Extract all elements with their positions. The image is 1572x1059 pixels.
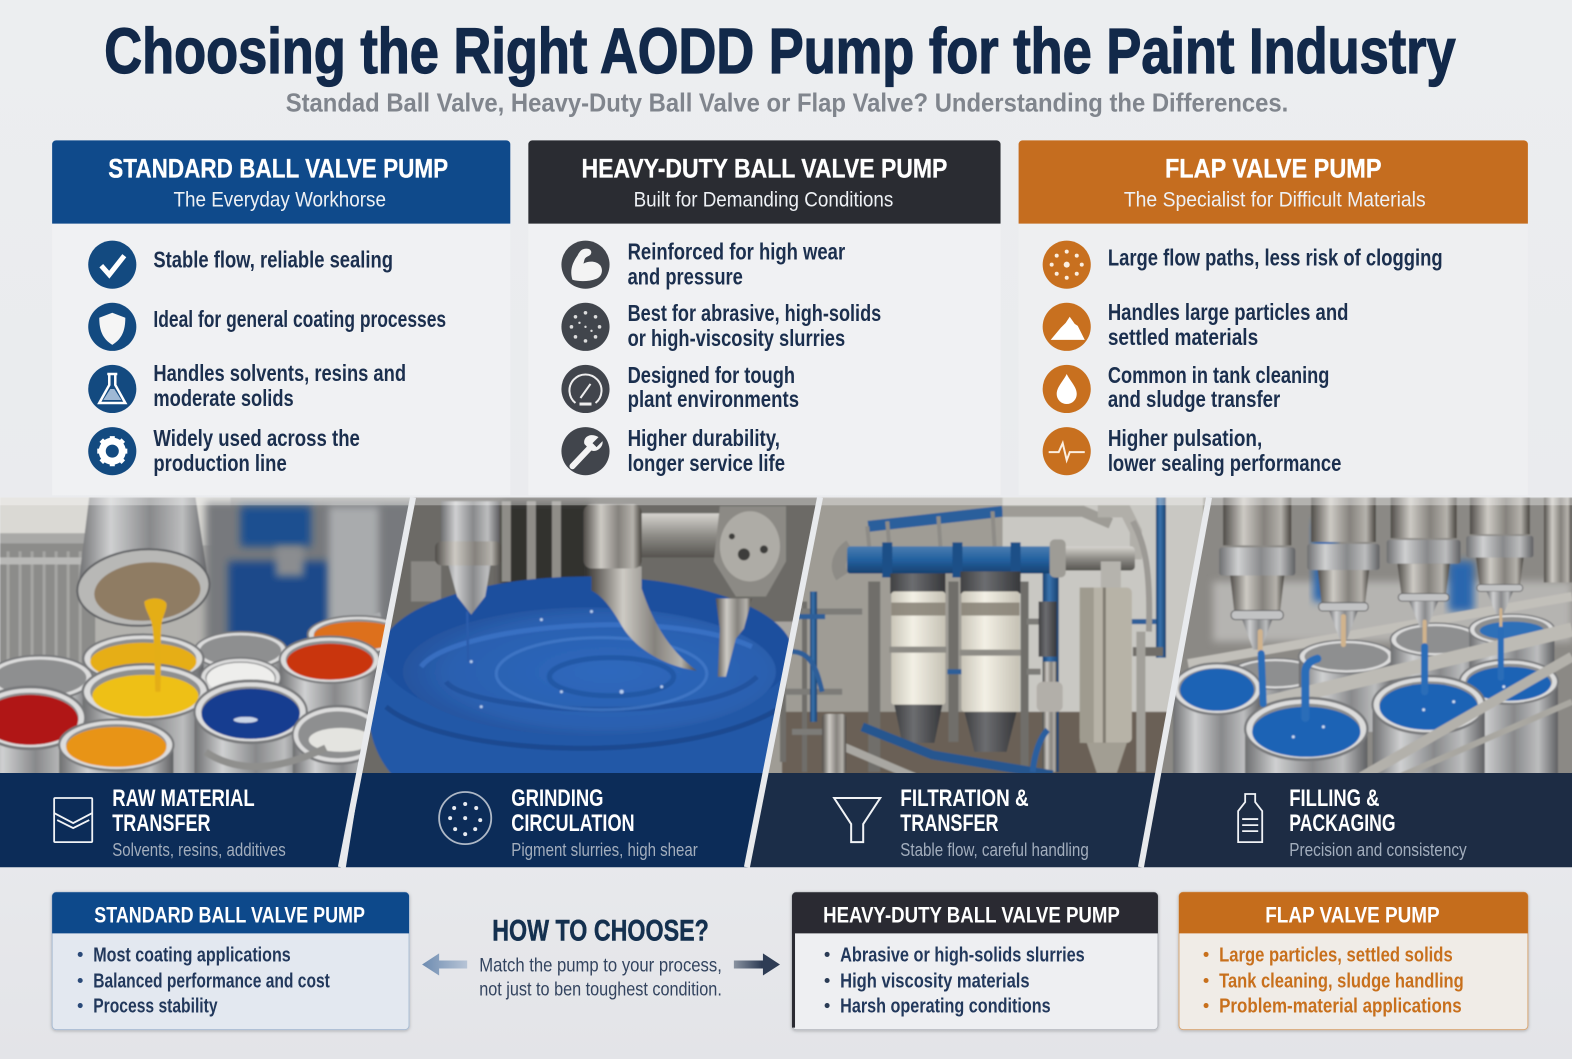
caption: filtration transfer: Stable flow, careful handling <box>900 840 1089 860</box>
header: heavy-duty: HEAVY-DUTY BALL VALVE PUMP <box>581 153 947 183</box>
item: higher durability: longer service life <box>628 450 785 476</box>
photo: filtration transfer <box>762 497 1223 778</box>
item: higher pulsation <box>1108 425 1342 476</box>
item: best for abrasive: or high-viscosity slurries <box>628 325 845 351</box>
how to choose: Match the pump to your process, <box>479 955 722 976</box>
bullet list <box>825 944 1085 1018</box>
item: large particles: settled materials <box>1108 324 1258 350</box>
header: heavy-duty: Built for Demanding Conditions <box>634 189 893 212</box>
icon: arm <box>561 241 610 289</box>
item: large particles: Handles large particles and <box>1108 299 1348 325</box>
item: widely used: production line <box>153 450 287 476</box>
caption: filtration transfer: TRANSFER <box>900 810 999 837</box>
item: widely used <box>153 425 360 476</box>
item: handles solvents: moderate solids <box>153 385 294 411</box>
card: flap valve pump: FLAP VALVE PUMP <box>1265 902 1440 927</box>
item: designed: Designed for tough <box>628 362 795 388</box>
panel: flap valve pump <box>1019 140 1528 495</box>
diagonal dividers <box>341 497 1209 867</box>
photo top haze <box>0 497 1572 505</box>
item: handles solvents: Handles solvents, resins and <box>153 360 406 386</box>
item: tank cleaning: Common in tank cleaning <box>1108 362 1329 388</box>
caption: raw material transfer: TRANSFER <box>112 810 211 837</box>
caption: filling packaging: PACKAGING <box>1289 810 1396 837</box>
icon: funnel <box>834 798 880 842</box>
bullet list: Most coating applications <box>93 944 291 966</box>
subtitle: Standad Ball Valve, Heavy-Duty Ball Valve or Flap Valve? Understanding the Differences. <box>286 87 1288 117</box>
item: tank cleaning <box>1108 362 1329 412</box>
caption: grinding circulation: Pigment slurries, high shear <box>511 840 698 860</box>
header: standard: STANDARD BALL VALVE PUMP <box>108 153 448 183</box>
photo: raw material transfer <box>0 497 410 773</box>
card: standard ball valve pump <box>52 892 409 1030</box>
icon: pulse <box>1043 427 1091 475</box>
icon: check <box>88 241 136 289</box>
caption: raw material transfer <box>0 773 361 867</box>
icon: wrench <box>561 427 610 475</box>
icon: gauge <box>561 365 610 413</box>
icon: container <box>54 798 92 842</box>
bullet list <box>78 944 330 1018</box>
item: stable flow: Stable flow, reliable sealing <box>153 247 393 273</box>
icon: flask <box>88 365 136 413</box>
photo: grinding circulation <box>351 497 832 778</box>
header: standard: The Everyday Workhorse <box>173 189 386 212</box>
icon: flow dots <box>1043 241 1091 289</box>
icon: shield <box>88 303 136 351</box>
how to choose <box>422 914 780 1001</box>
caption: grinding circulation <box>346 773 765 867</box>
item: large particles <box>1108 299 1348 350</box>
header: heavy-duty <box>528 140 1001 224</box>
panel: heavy-duty ball valve pump <box>528 140 1001 495</box>
bullet list: Process stability <box>93 996 218 1018</box>
item: higher durability <box>628 425 785 476</box>
arrow: right <box>734 953 780 975</box>
card: flap valve pump <box>1179 892 1528 1030</box>
card: heavy-duty ball valve pump <box>792 892 1158 1030</box>
icon: drop <box>1043 365 1091 413</box>
card: heavy-duty ball valve pump: HEAVY-DUTY BALL VALVE PUMP <box>823 902 1120 927</box>
icon: bottle <box>1238 794 1262 842</box>
item: higher durability: Higher durability, <box>628 425 780 451</box>
caption: filtration transfer: FILTRATION & <box>900 785 1029 812</box>
bullet list: High viscosity materials <box>840 971 1030 993</box>
how to choose: HOW TO CHOOSE? <box>492 914 709 947</box>
header: flap <box>1019 140 1528 224</box>
icon: gear <box>88 427 136 475</box>
bullet list: Abrasive or high-solids slurries <box>840 944 1085 966</box>
item: tank cleaning: and sludge transfer <box>1108 386 1280 412</box>
bullet list <box>1204 944 1464 1018</box>
how to choose: not just to ben toughest condition. <box>479 980 722 1001</box>
caption: filtration transfer <box>747 773 1159 867</box>
caption: filling packaging: Precision and consistency <box>1289 840 1467 860</box>
caption: filling packaging: FILLING & <box>1289 785 1380 812</box>
item: handles solvents <box>153 360 406 411</box>
item: higher pulsation: lower sealing performance <box>1108 450 1342 476</box>
icon: particles <box>561 303 610 351</box>
item: reinforced: and pressure <box>628 264 743 290</box>
header: flap: FLAP VALVE PUMP <box>1165 153 1382 183</box>
icon: particle disc <box>439 792 491 844</box>
bullet list: Tank cleaning, sludge handling <box>1219 971 1464 993</box>
caption: grinding circulation: GRINDING <box>511 785 604 812</box>
photo: filling packaging <box>1161 497 1572 773</box>
item: best for abrasive: Best for abrasive, high-solids <box>628 300 881 326</box>
item: designed <box>628 362 799 412</box>
item: reinforced: Reinforced for high wear <box>628 239 845 265</box>
item: ideal: Ideal for general coating processes <box>153 306 446 332</box>
bullet list: Harsh operating conditions <box>840 996 1051 1018</box>
icon: mountain <box>1043 303 1091 351</box>
header: flap: The Specialist for Difficult Materials <box>1124 189 1426 212</box>
caption: raw material transfer: Solvents, resins, additives <box>112 840 286 860</box>
header: standard <box>52 140 510 224</box>
caption: raw material transfer: RAW MATERIAL <box>112 785 255 812</box>
bullet list: Balanced performance and cost <box>93 971 330 993</box>
item: best for abrasive <box>628 300 881 351</box>
bullet list: Problem-material applications <box>1219 996 1462 1018</box>
panel: standard ball valve pump <box>52 140 510 495</box>
caption: grinding circulation: CIRCULATION <box>511 810 635 837</box>
item: designed: plant environments <box>628 386 799 412</box>
item: large flow paths: Large flow paths, less risk of clogging <box>1108 245 1443 271</box>
arrow: left <box>422 953 467 975</box>
item: higher pulsation: Higher pulsation, <box>1108 425 1262 451</box>
card: standard ball valve pump: STANDARD BALL VALVE PUMP <box>94 902 365 927</box>
caption: filling packaging <box>1141 773 1572 867</box>
item: widely used: Widely used across the <box>153 425 360 451</box>
bullet list: Large particles, settled solids <box>1219 944 1453 966</box>
item: reinforced <box>628 239 845 290</box>
